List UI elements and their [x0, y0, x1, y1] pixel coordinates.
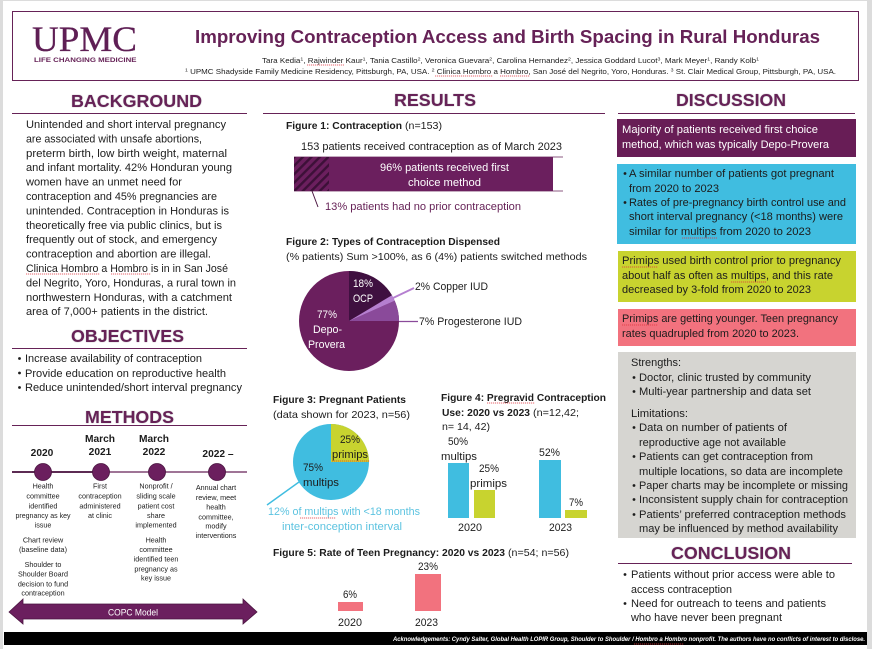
timeline: 2020: issue: [35, 521, 51, 530]
authors: Tara Kedia: [262, 56, 297, 65]
panel: strengths and limitations: Paper charts may be incomplete or missing: [639, 480, 848, 492]
callout: similar pregnancy rates: similar for multips from 2020 to 2023: [629, 226, 811, 238]
conclusion list: Need for outreach to teens and patients: [631, 598, 826, 610]
timeline: 2022 onward: health: [206, 503, 226, 512]
callout: primips birth control: decreased by 3-fold from 2020 to 2023: [622, 284, 811, 296]
callout: similar pregnancy rates: Rates of pre-pregnancy birth control use and: [629, 197, 846, 209]
stacked bar: [294, 157, 563, 191]
bar chart: 2020 vs 2023: 7%: [569, 497, 583, 509]
figure 2: types of contraception: Figure 2: Types of Contraception Dispensed: [286, 237, 500, 248]
timeline: 2020: Health: [33, 482, 53, 491]
panel: strengths and limitations: Inconsistent supply chain for contraception: [639, 494, 848, 506]
timeline: March 2022: Nonprofit /: [139, 482, 173, 491]
stacked bar: choice method: [408, 177, 481, 189]
timeline: March 2022: 2022: [143, 447, 166, 458]
callout: first choice method: method, which was typically Depo-Provera: [622, 139, 830, 151]
callout: no prior contraception: [312, 191, 521, 213]
timeline: March 2022: identified teen: [134, 555, 178, 564]
conclusion list: access contraception: [631, 584, 732, 596]
pie chart: primips and multips: multips: [303, 477, 339, 489]
affiliations: 1: [185, 68, 188, 74]
timeline: March 2022: key issue: [141, 574, 171, 583]
callout: first choice method: [617, 119, 856, 157]
conclusion list: [624, 569, 835, 624]
callout: inter-conception interval: inter-conception interval: [282, 521, 402, 533]
figure 2: types of contraception: [286, 237, 587, 371]
callout: inter-conception interval: 12% of multips with <18 months: [268, 506, 420, 518]
pie chart: contraception types: Provera: [308, 339, 346, 351]
authors: 2: [418, 56, 421, 62]
figure 5: teen pregnancy: (n=54; n=56): [508, 548, 569, 559]
authors: , Carolina Hernandez: [492, 56, 568, 65]
background text block: and infant mortality. 42% Honduran young: [26, 162, 232, 174]
callout: primips birth control: [618, 251, 856, 302]
timeline: March 2022: share: [147, 511, 165, 520]
panel: discussion: [617, 90, 856, 538]
authors: 1: [707, 56, 710, 62]
authors: , Jessica Goddard Lucot: [571, 56, 657, 65]
authors: 1: [363, 56, 366, 62]
timeline: March 2021: administered: [79, 502, 121, 511]
background text block: del Negrito, Yoro, Honduras, a rural town in: [26, 277, 236, 289]
heading: conclusion: CONCLUSION: [671, 543, 791, 563]
heading: background: BACKGROUND: [71, 91, 202, 111]
objectives list: Increase availability of contraception: [25, 353, 202, 365]
bar chart: 2020 vs 2023: 25%: [479, 463, 499, 475]
panel: strengths and limitations: Multi-year partnership and data set: [639, 386, 812, 398]
timeline: 2020: (baseline data): [19, 545, 67, 554]
callout: no prior contraception: 13% patients had no prior contraception: [325, 201, 521, 213]
callout: inter-conception interval: [267, 482, 420, 533]
bar chart: teen pregnancy rate: [338, 561, 441, 629]
timeline: March 2022: [134, 434, 178, 583]
figure 4: pregravid contraception: Use: 2020 vs 2023: [442, 408, 530, 419]
figure 4: pregravid contraception: [441, 393, 606, 534]
timeline: [12, 434, 247, 598]
background text block: Unintended and short interval pregnancy: [26, 119, 226, 131]
timeline: March 2021: March: [85, 434, 115, 445]
panel: background: [12, 91, 247, 318]
figure 3: pregnant patients: [267, 395, 420, 533]
heading: objectives: OBJECTIVES: [71, 326, 184, 346]
timeline: 2020: Shoulder Board: [18, 570, 68, 579]
authors: 1: [300, 56, 304, 62]
timeline: March 2022: patient cost: [138, 502, 174, 511]
panel: strengths and limitations: Limitations:: [631, 408, 688, 420]
panel: strengths and limitations: [618, 352, 856, 538]
panel: strengths and limitations: Strengths:: [631, 357, 681, 369]
timeline: 2022 onward: [196, 449, 237, 540]
bar chart: 2020 vs 2023: 2023: [549, 522, 572, 534]
callout: teen pregnancy: rates quadrupled from 2020 to 2023.: [622, 328, 799, 340]
authors: 2: [489, 56, 493, 62]
figure 1: contraception: (n=153): [405, 121, 442, 132]
figure 1: contraception: Figure 1: Contraception: [286, 121, 402, 132]
panel: objectives: [12, 326, 247, 394]
authors: 3: [657, 56, 661, 62]
timeline: 2020: 2020: [31, 448, 54, 459]
bar chart: 2020 vs 2023: 50%: [448, 436, 468, 448]
timeline: March 2021: [78, 434, 122, 520]
figure 1: contraception: 153 patients received contraception as of March 2023: [301, 141, 562, 153]
timeline: March 2021: 2021: [89, 447, 112, 458]
pie chart: contraception types: 77%: [317, 309, 337, 321]
timeline: March 2021: at clinic: [88, 511, 112, 520]
objectives list: Provide education on reproductive health: [25, 368, 226, 380]
panel: results: [263, 90, 606, 629]
timeline: 2020: [16, 448, 71, 598]
background text block: are associated with unsafe abortions,: [26, 133, 202, 145]
pie chart: contraception types: Depo-: [313, 324, 342, 336]
logo: UPMC: UPMC: [32, 19, 137, 59]
timeline: 2020: identified: [29, 502, 57, 511]
panel: strengths and limitations: multiple locations, so data are incomplete: [639, 466, 843, 478]
heading: methods: METHODS: [85, 407, 174, 427]
panel: methods: [9, 407, 257, 624]
callout: similar pregnancy rates: from 2020 to 2023: [629, 183, 719, 195]
title: Improving Contraception Access and Birth Spacing in Rural Honduras: [195, 26, 820, 47]
bar chart: 2020 vs 2023: 2020: [458, 522, 482, 534]
timeline: March 2021: contraception: [78, 492, 122, 501]
timeline: 2022 onward: Annual chart: [196, 483, 236, 492]
timeline: 2020: Chart review: [23, 536, 64, 545]
panel: strengths and limitations: reproductive age not available: [639, 437, 786, 449]
arrow: COPC Model: COPC Model: [108, 608, 158, 618]
background text block: northwestern Honduras, with a catchment: [26, 292, 233, 304]
authors: 1: [756, 56, 759, 62]
bar chart: teen pregnancy rate: 6%: [343, 589, 357, 601]
bar chart: 2020 vs 2023: 52%: [539, 447, 560, 459]
callout: primips birth control: about half as often as multips, and this rate: [622, 270, 833, 282]
panel: strengths and limitations: Patients can get contraception from: [639, 451, 813, 463]
background text block: women have an unmet need for: [25, 177, 182, 189]
figure 4: pregravid contraception: n= 14, 42): [442, 422, 490, 433]
callout: similar pregnancy rates: A similar number of patients got pregnant: [629, 168, 835, 180]
pie chart: primips and multips: 75%: [303, 462, 323, 474]
authors: , Mark Meyer: [660, 56, 708, 65]
stacked bar: 96% patients received first: [380, 162, 510, 174]
timeline: March 2022: Health: [146, 536, 166, 545]
background text block: frequently out of stock, and emergency: [26, 234, 217, 246]
bar chart: teen pregnancy rate: 23%: [418, 561, 438, 573]
background text block: preterm birth, low birth weight, maternal: [26, 148, 227, 160]
timeline: 2022 onward: committee,: [198, 512, 234, 521]
figure 2: types of contraception: (% patients) Sum >100%, as 6 (4%) patients switched methods: [286, 252, 587, 263]
pie chart: contraception types: 2% Copper IUD: [415, 281, 488, 293]
figure 4: pregravid contraception: Figure 4: Pregravid Contraception: [441, 393, 606, 404]
background text block: Clinica Hombro a Hombro is in in San José: [26, 263, 228, 275]
bar chart: 2020 vs 2023: primips: [470, 478, 507, 490]
affiliations: 3: [671, 68, 674, 74]
conclusion list: who have never been pregnant: [630, 612, 783, 624]
timeline: March 2022: committee: [139, 545, 173, 554]
callout: similar pregnancy rates: [617, 164, 856, 244]
timeline: March 2022: implemented: [135, 521, 177, 530]
authors: , Randy Kolb: [710, 56, 756, 65]
figure 5: teen pregnancy: Figure 5: Rate of Teen Pregnancy: 2020 vs 2023: [273, 548, 505, 559]
pie chart: contraception types: OCP: [353, 293, 373, 305]
logo: UPMC: LIFE CHANGING MEDICINE: [34, 57, 137, 64]
timeline: 2022 onward: modify: [205, 522, 227, 531]
affiliations: Clinica Hombro a Hombro, San José del Negrito, Yoro, Honduras.: [435, 67, 671, 76]
bar chart: teen pregnancy rate: 2020: [338, 617, 362, 629]
pie chart: contraception types: 18%: [353, 278, 373, 290]
pie chart: primips and multips: [293, 424, 370, 500]
figure 5: teen pregnancy: [273, 548, 569, 629]
background text block: contraception and 45% pregnancies are: [26, 191, 217, 203]
timeline: 2020: Shoulder to: [25, 560, 61, 569]
authors: , Veronica Guevara: [421, 56, 490, 65]
panel: strengths and limitations: may be influenced by method availability: [639, 523, 838, 535]
panel: strengths and limitations: Data on number of patients of: [639, 422, 788, 434]
panel: strengths and limitations: Doctor, clinic trusted by community: [639, 372, 811, 384]
callout: teen pregnancy: Primips are getting younger. Teen pregnancy: [622, 313, 838, 325]
timeline: 2020: contraception: [21, 589, 65, 598]
pie chart: primips and multips: primips: [332, 449, 368, 461]
figure 3: pregnant patients: Figure 3: Pregnant Patients: [273, 395, 406, 406]
timeline: 2022 onward: review, meet: [196, 493, 236, 502]
heading: results: RESULTS: [394, 90, 476, 110]
objectives list: [18, 353, 242, 394]
conclusion list: Patients without prior access were able to: [631, 569, 835, 581]
callout: similar pregnancy rates: short interval pregnancy (<18 months) were: [629, 211, 843, 223]
figure 3: pregnant patients: (data shown for 2023, n=56): [273, 410, 410, 421]
background text block: contraception and abortion are illegal.: [26, 249, 211, 261]
bar chart: 2020 vs 2023: [441, 436, 587, 534]
timeline: 2022 onward: 2022 –: [202, 449, 234, 460]
timeline: March 2022: March: [139, 434, 169, 445]
footer: acknowledgements: [4, 632, 867, 645]
affiliations: 2: [432, 68, 435, 74]
authors: , Rajwinder Kaur: [303, 56, 363, 65]
authors: , Tania Castillo: [366, 56, 418, 65]
affiliations: St. Clair Medical Group, Pittsburgh, PA, USA.: [674, 67, 836, 76]
heading: discussion: DISCUSSION: [676, 90, 786, 110]
panel: conclusion: [618, 543, 852, 624]
background text block: unintended. Contraception in Honduras is: [26, 205, 229, 217]
timeline: 2020: pregnancy as key: [16, 511, 71, 520]
figure 1: contraception: [286, 121, 563, 213]
background text block: theoretically free via public clinics, but is: [26, 220, 222, 232]
timeline: March 2021: First: [93, 482, 107, 491]
callout: teen pregnancy: [618, 309, 856, 346]
timeline: 2020: decision to fund: [18, 579, 68, 588]
authors: 2: [568, 56, 571, 62]
header banner: [12, 12, 858, 80]
panel: strengths and limitations: Patients’ preferred contraception methods: [639, 509, 846, 521]
bar chart: teen pregnancy rate: 2023: [415, 617, 438, 629]
callout: first choice method: Majority of patients received first choice: [622, 124, 818, 136]
timeline: March 2022: pregnancy as: [134, 565, 178, 574]
pie chart: contraception types: 7% Progesterone IUD: [419, 316, 522, 328]
pie chart: contraception types: [299, 271, 522, 371]
pie chart: primips and multips: 25%: [340, 434, 360, 446]
objectives list: Reduce unintended/short interval pregnancy: [25, 382, 242, 394]
background text block: area of 7,000+ patients in the district.: [26, 306, 208, 318]
figure 4: pregravid contraception: (n=12,42;: [533, 408, 579, 419]
callout: primips birth control: Primips used birth control prior to pregnancy: [622, 255, 841, 267]
affiliations: UPMC Shadyside Family Medicine Residency, Pittsburgh, PA, USA.: [188, 67, 432, 76]
timeline: 2022 onward: interventions: [196, 531, 237, 540]
bar chart: 2020 vs 2023: multips: [441, 451, 477, 463]
timeline: March 2022: sliding scale: [136, 492, 176, 501]
timeline: 2020: committee: [26, 492, 60, 501]
arrow: COPC Model: [9, 599, 257, 624]
background text block: [25, 119, 236, 318]
